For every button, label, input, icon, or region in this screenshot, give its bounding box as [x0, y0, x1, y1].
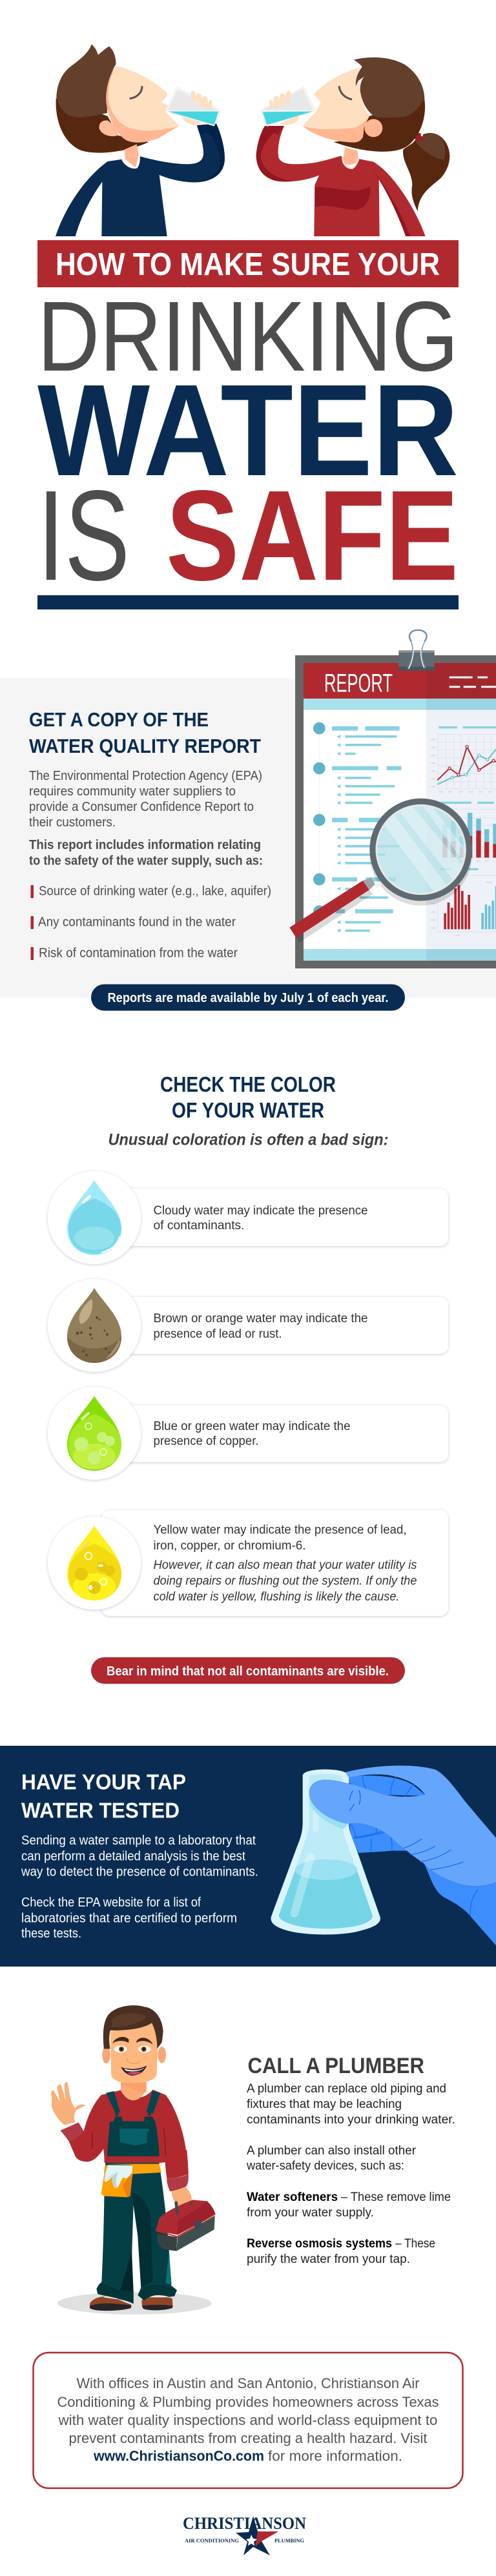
illustration: gloved hand holding flask	[271, 1766, 496, 1945]
call a plumber description: from your water supply.	[247, 2206, 374, 2220]
title line: water: WATER	[37, 357, 459, 503]
row: yellow water: cold water is yellow, flushing is likely the cause.	[154, 1590, 399, 1604]
panel: company information: www.ChristiansonCo.com	[93, 2448, 264, 2464]
row: blue or green water: presence of copper.	[154, 1435, 258, 1448]
row: blue or green water: Blue or green water may indicate the	[154, 1420, 350, 1433]
icon: green water drop	[67, 1396, 121, 1471]
company logo: PLUMBING	[274, 2538, 304, 2544]
call a plumber description: Water softeners	[247, 2191, 338, 2204]
report description text: provide a Consumer Confidence Report to	[29, 800, 254, 814]
binder clip	[398, 630, 435, 671]
row: cloudy water: Cloudy water may indicate the presence	[154, 1204, 368, 1218]
report description text	[29, 769, 263, 868]
panel: water quality report	[0, 679, 496, 997]
panel: company information: Conditioning & Plumbing provides homeowners across Texas	[57, 2394, 439, 2410]
illustration: man drinking water	[56, 44, 225, 236]
panel: company information	[34, 2353, 462, 2488]
panel: company information: with water quality inspections and world-class equipment to	[57, 2412, 437, 2428]
icon: cloudy water drop	[67, 1180, 121, 1255]
call a plumber description: A plumber can replace old piping and	[247, 2082, 446, 2096]
row: brown or orange water: presence of lead or rust.	[154, 1327, 282, 1341]
illustration: woman drinking water	[256, 57, 450, 236]
tap water description: laboratories that are certified to perform	[21, 1911, 237, 1925]
report description text: their customers.	[29, 815, 116, 830]
row: blue or green water	[48, 1387, 448, 1480]
title underline	[37, 595, 459, 609]
tap water heading: WATER TESTED	[21, 1799, 180, 1822]
report heading: REPORT	[324, 669, 393, 697]
panel: company information: prevent contaminants from creating a health hazard. Visit	[68, 2430, 428, 2446]
call a plumber description: Reverse osmosis systems	[247, 2237, 392, 2251]
report bullet list	[31, 884, 271, 961]
report section heading: GET A COPY OF THE	[29, 708, 209, 731]
report section heading	[29, 708, 261, 757]
color section subtitle: Unusual coloration is often a bad sign:	[108, 1131, 389, 1149]
row: yellow water: iron, copper, or chromium-6.	[154, 1539, 306, 1553]
call a plumber description: contaminants into your drinking water.	[247, 2113, 455, 2127]
call a plumber description: A plumber can also install other	[247, 2144, 417, 2158]
row: brown or orange water: Brown or orange water may indicate the	[154, 1312, 368, 1325]
tap water heading	[21, 1770, 186, 1822]
tap water description	[21, 1834, 258, 1941]
call a plumber heading: CALL A PLUMBER	[248, 2054, 424, 2078]
row: yellow water	[48, 1510, 448, 1616]
report description text: to the safety of the water supply, such as:	[29, 854, 263, 868]
report description text: requires community water suppliers to	[29, 784, 236, 799]
call a plumber description: fixtures that may be leaching	[247, 2098, 402, 2111]
panel: company information: With offices in Austin and San Antonio, Christianson Air	[76, 2375, 420, 2391]
tap water description: way to detect the presence of contaminants.	[21, 1865, 258, 1879]
call a plumber description: – These remove lime	[341, 2191, 451, 2204]
title line: how to make sure your: HOW TO MAKE SURE YOUR	[56, 247, 440, 282]
panel: have your tap water tested	[0, 1746, 496, 1967]
tap water description: Check the EPA website for a list of	[21, 1896, 201, 1910]
company logo: AIR CONDITIONING	[185, 2538, 239, 2544]
bar charts	[431, 809, 496, 935]
row: yellow water: However, it can also mean that your water utility is	[154, 1559, 417, 1572]
report bullet list: Any contaminants found in the water	[38, 915, 236, 930]
icon: yellow water drop	[67, 1526, 121, 1600]
callout: contaminants not all visible: Bear in mind that not all contaminants are visible.	[107, 1664, 389, 1679]
report section heading: WATER QUALITY REPORT	[29, 735, 261, 757]
company logo	[183, 2514, 306, 2555]
color section heading	[160, 1072, 336, 1122]
callout: reports availability	[91, 984, 405, 1011]
row: yellow water: doing repairs or flushing out the system. If only the	[154, 1574, 417, 1588]
tap water heading: HAVE YOUR TAP	[21, 1770, 186, 1794]
row: yellow water: Yellow water may indicate the presence of lead,	[154, 1524, 407, 1537]
call a plumber description	[246, 2082, 455, 2266]
title banner	[37, 240, 459, 287]
tap water description: Sending a water sample to a laboratory that	[21, 1834, 256, 1848]
call a plumber description: water-safety devices, such as:	[246, 2159, 404, 2173]
color section heading: CHECK THE COLOR	[160, 1072, 336, 1096]
line chart	[431, 734, 496, 792]
call a plumber description: purify the water from your tap.	[247, 2253, 410, 2266]
panel: company information: for more information.	[268, 2448, 402, 2464]
callout: contaminants not all visible	[91, 1657, 405, 1684]
color section heading: OF YOUR WATER	[172, 1098, 324, 1122]
report description text: The Environmental Protection Agency (EPA)	[29, 769, 262, 783]
illustration: plumber	[51, 2005, 215, 2315]
toolbox	[156, 2200, 215, 2251]
illustration: report clipboard with magnifier	[289, 630, 496, 968]
report description text: This report includes information relating	[29, 838, 261, 852]
call a plumber description: – These	[395, 2237, 435, 2251]
tap water description: these tests.	[21, 1927, 81, 1941]
company logo: CHRISTIANSON	[183, 2514, 306, 2533]
magnifying glass	[289, 801, 478, 943]
title block	[37, 240, 459, 609]
icon: brown water drop	[67, 1288, 121, 1363]
row: cloudy water: of contaminants.	[154, 1219, 244, 1232]
row: brown or orange water	[48, 1279, 448, 1372]
row: cloudy water	[48, 1171, 448, 1264]
title line: is: IS	[37, 464, 130, 608]
tap water description: can perform a detailed analysis is the best	[21, 1849, 245, 1863]
report bullet list: Risk of contamination from the water	[39, 946, 238, 961]
callout: reports availability: Reports are made available by July 1 of each year.	[107, 991, 389, 1005]
report bullet list: Source of drinking water (e.g., lake, aquifer)	[39, 884, 271, 899]
